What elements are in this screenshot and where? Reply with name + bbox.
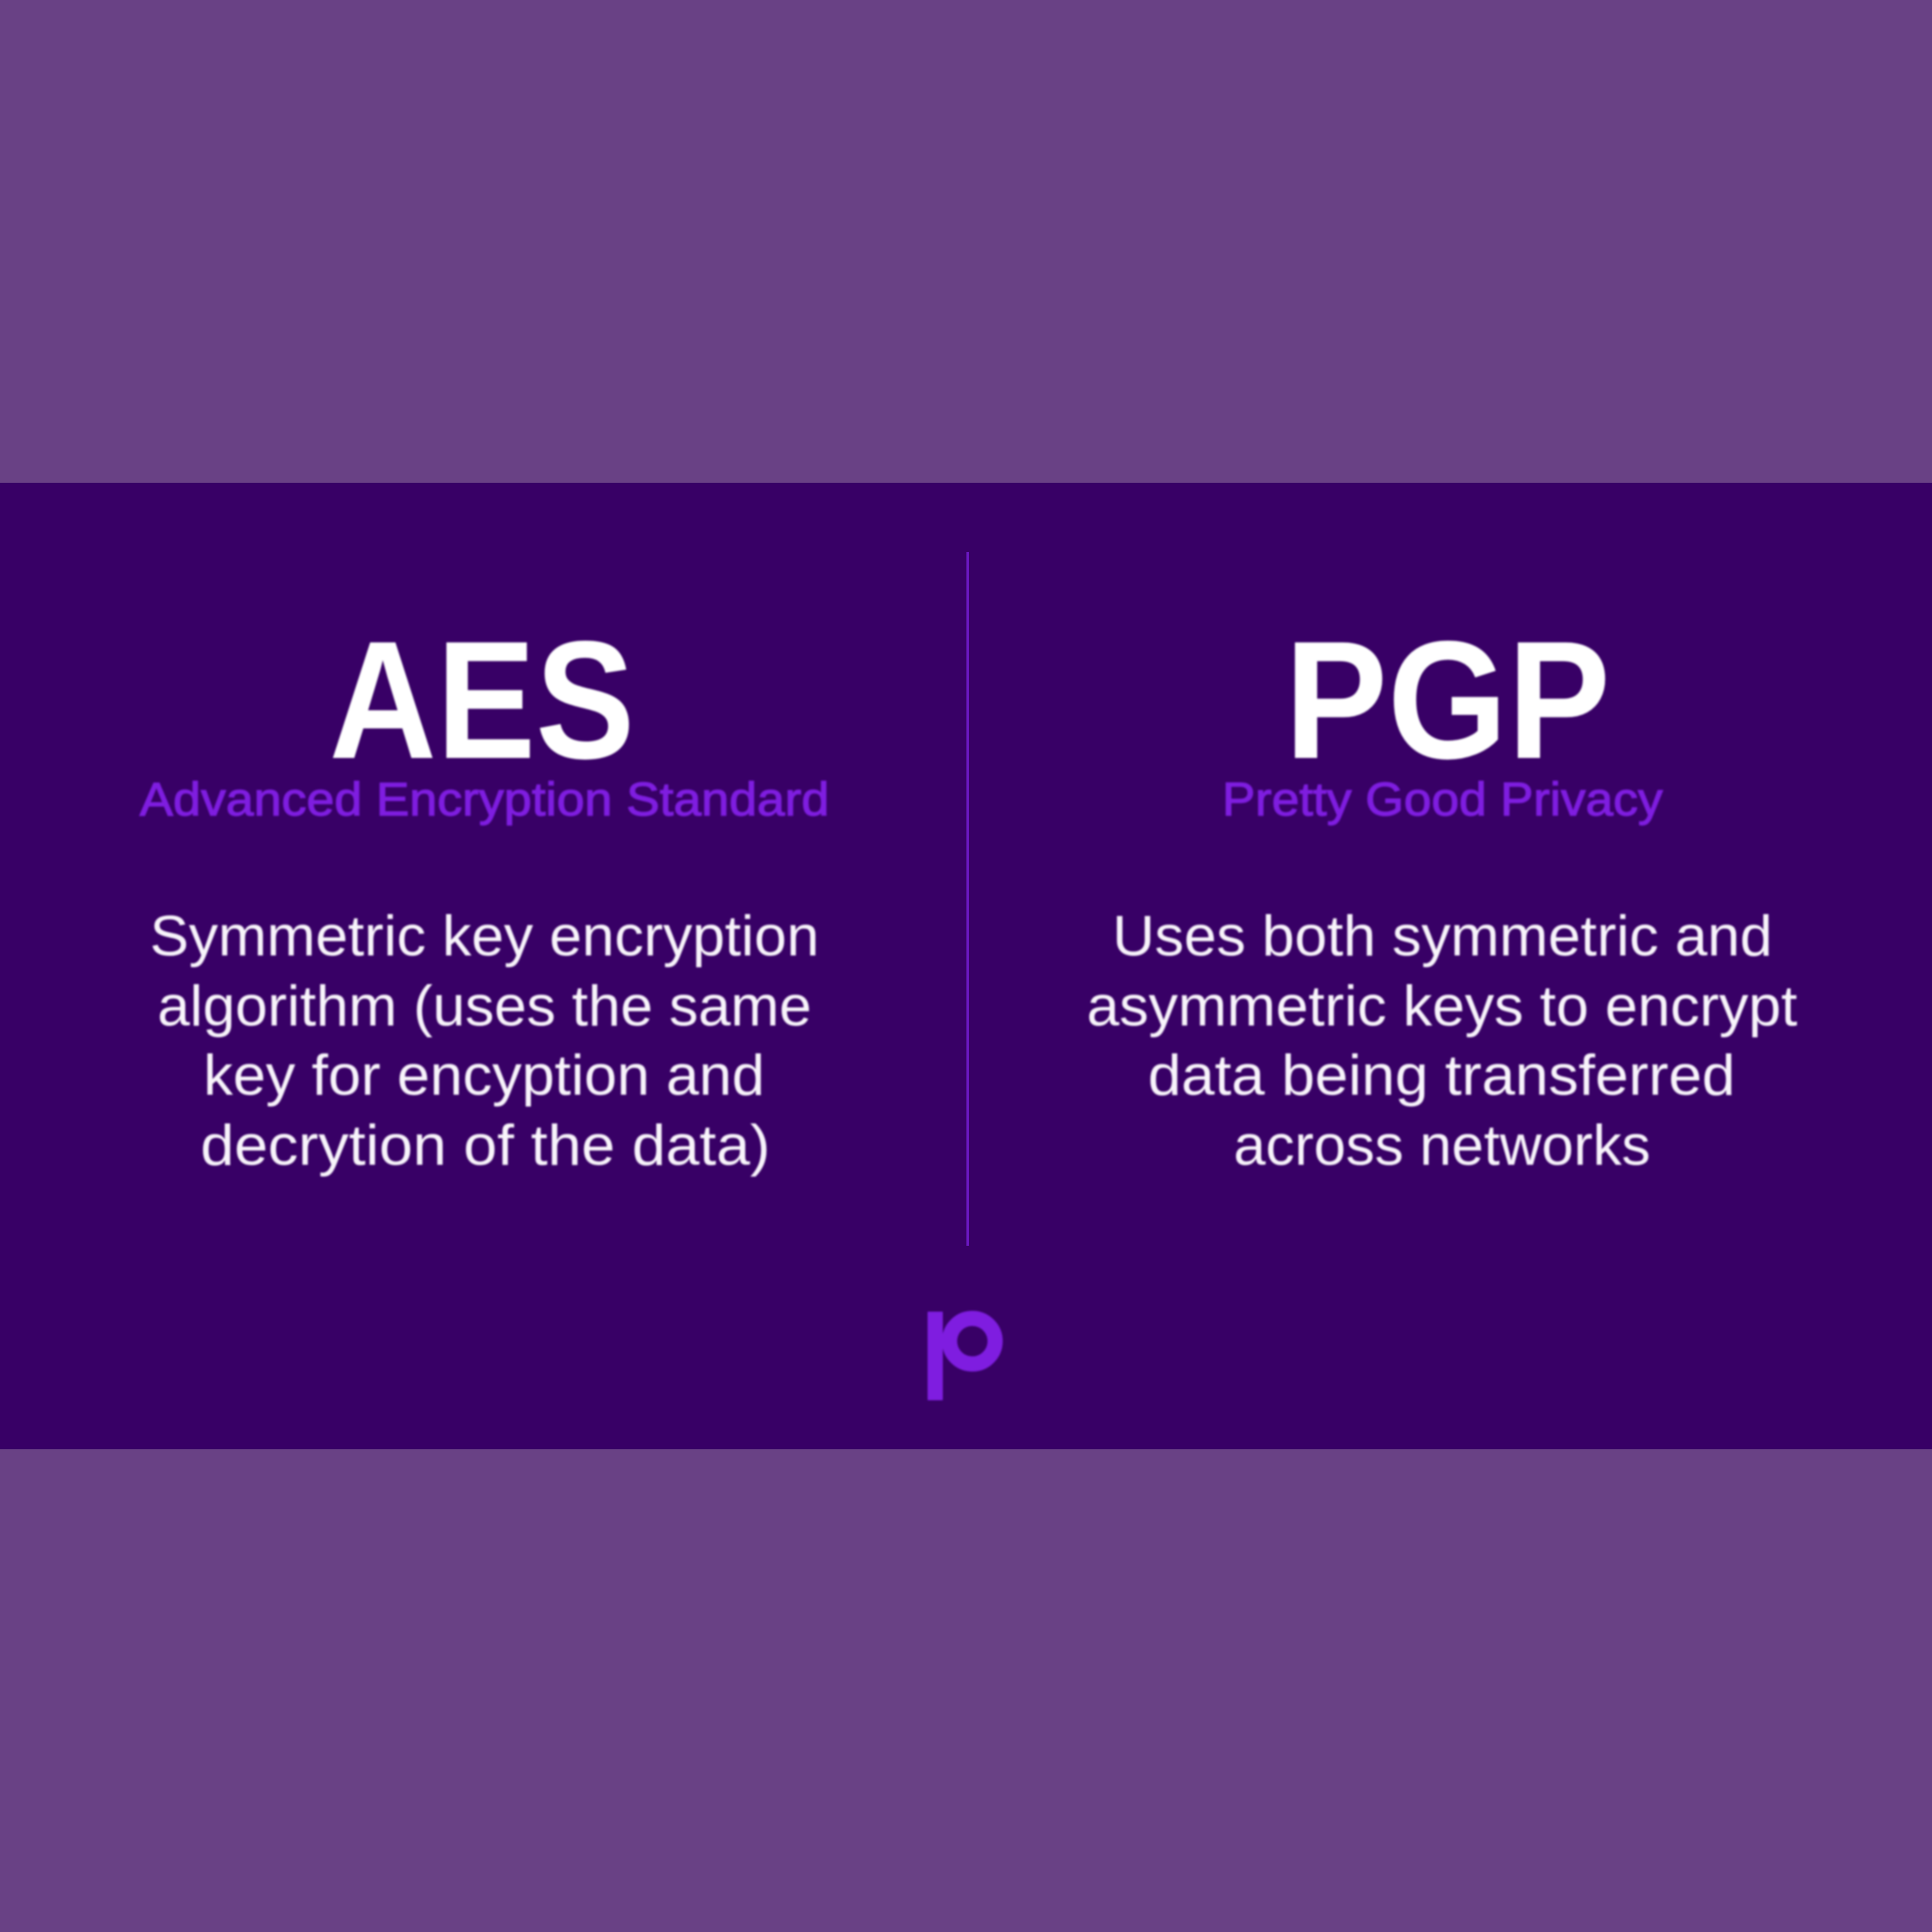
description: PGP: Uses both symmetric and	[1112, 904, 1772, 968]
panel: AES	[140, 607, 830, 1177]
description: PGP: asymmetric keys to encrypt	[1087, 974, 1798, 1038]
heading: AES: AES	[329, 607, 635, 794]
panel: PGP	[1087, 607, 1798, 1177]
subtitle: Pretty Good Privacy: Pretty Good Privacy	[1222, 772, 1663, 825]
description: AES: algorithm (uses the same	[157, 974, 812, 1038]
description: PGP: data being transferred	[1148, 1043, 1735, 1107]
subtitle: Advanced Encryption Standard: Advanced Encryption Standard	[140, 772, 830, 825]
description: AES: Symmetric key encryption	[150, 904, 819, 968]
description: PGP	[1087, 904, 1798, 1177]
description: AES: key for encyption and	[203, 1043, 765, 1107]
heading: PGP: PGP	[1285, 607, 1610, 794]
description: PGP: across networks	[1234, 1113, 1651, 1177]
description: AES: decrytion of the data)	[201, 1113, 770, 1177]
description: AES	[150, 904, 819, 1177]
central dark band	[0, 483, 1932, 1449]
icon: logo	[928, 1312, 995, 1400]
